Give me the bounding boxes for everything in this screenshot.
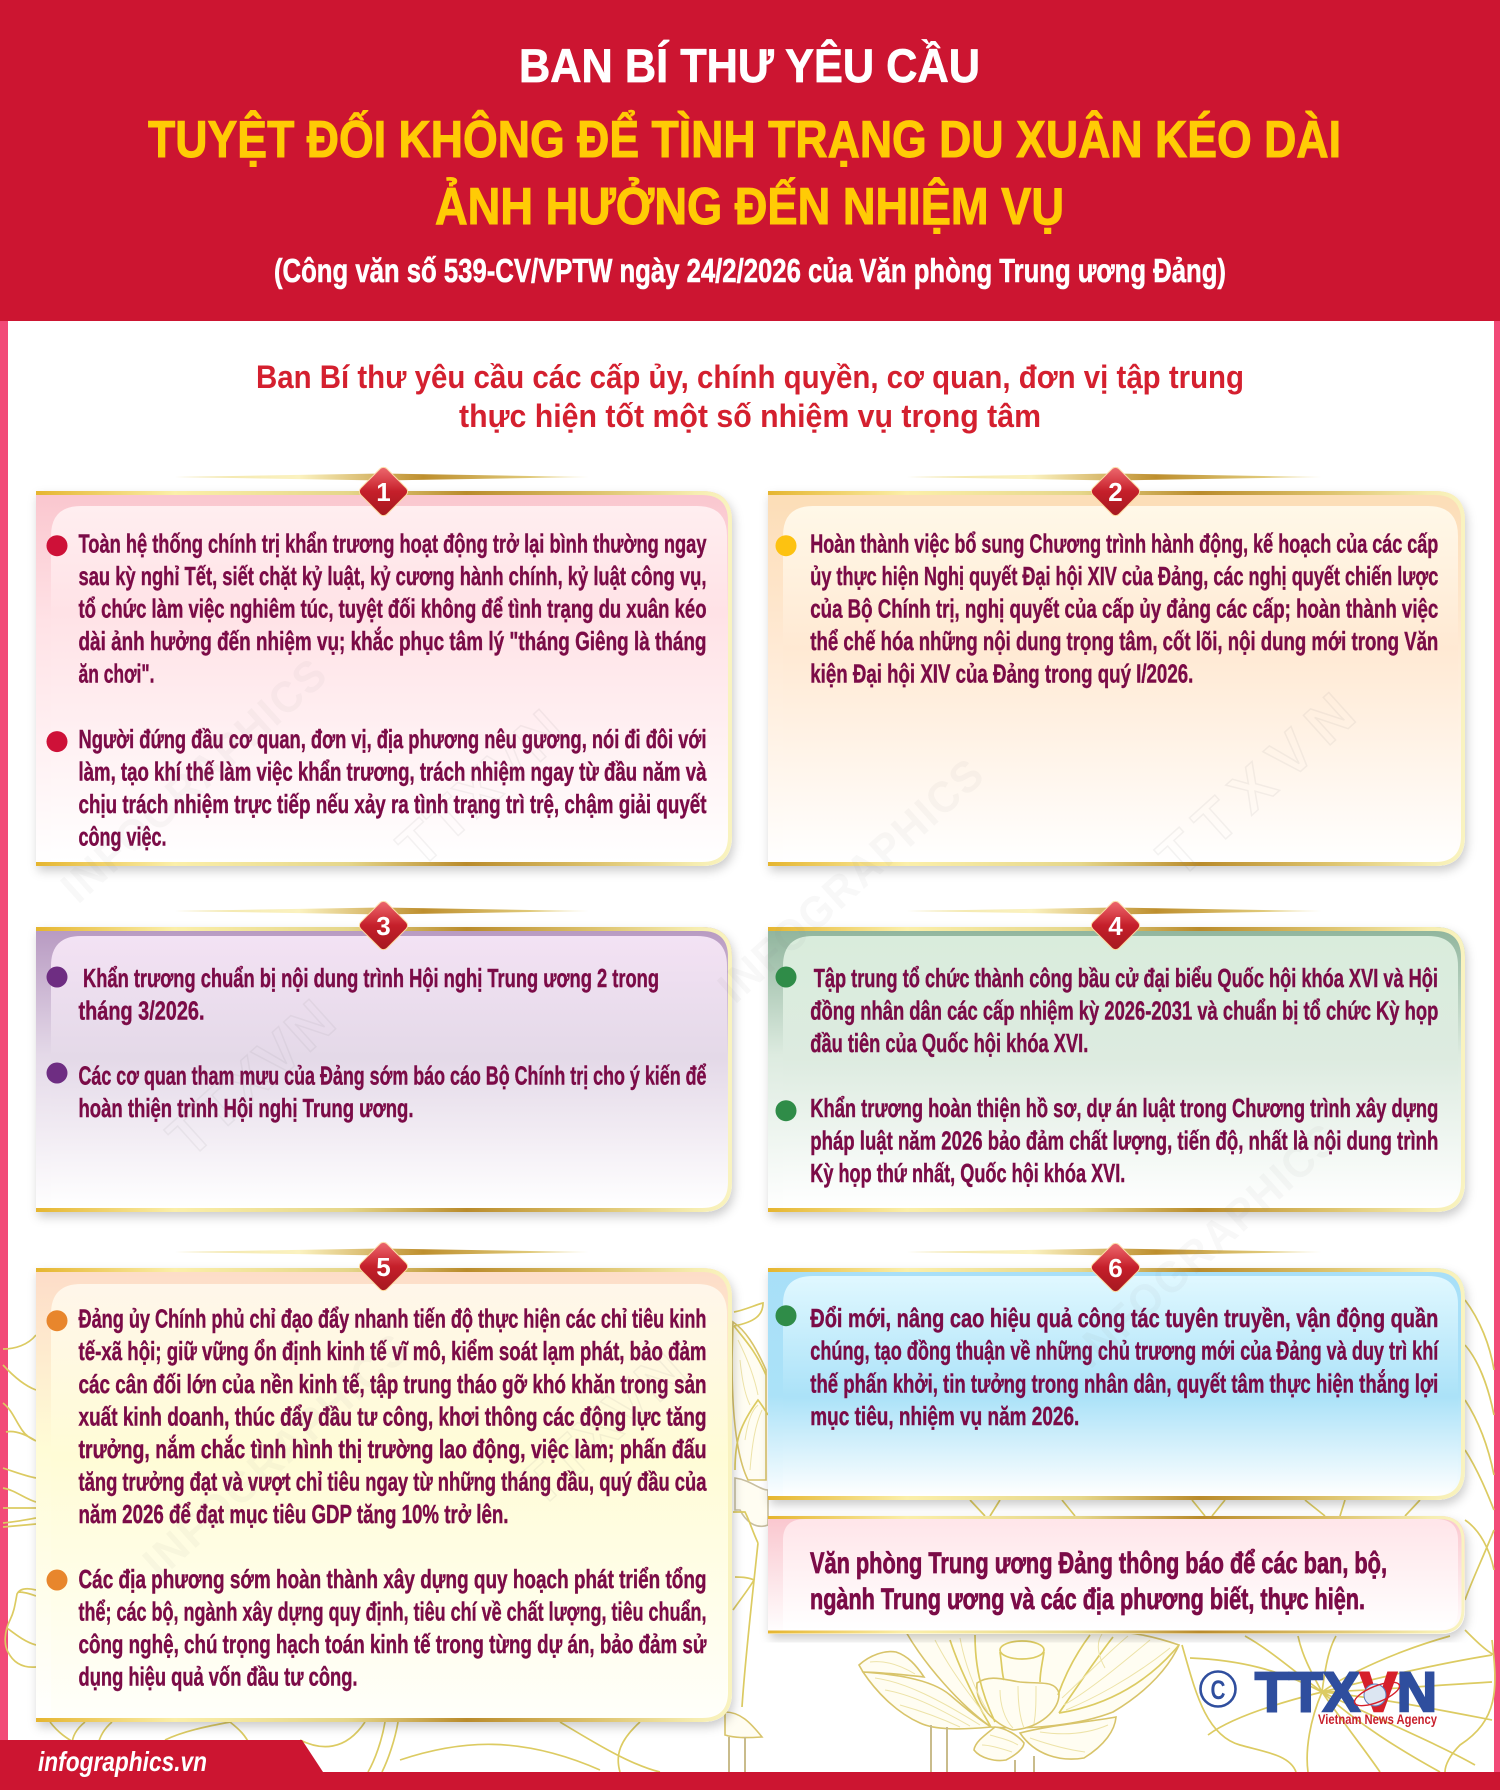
bullet text 5.2: dụng hiệu quả vốn đầu tư công. — [78, 1662, 358, 1692]
badge 3: 3 — [376, 911, 391, 941]
bullet text 5.1: trưởng, nắm chắc tình hình thị trường lao động, việc làm; phấn đấu — [78, 1434, 706, 1464]
document reference: (Công văn số 539-CV/VPTW ngày 24/2/2026 của Văn phòng Trung ương Đảng) — [274, 252, 1226, 289]
subheading: Ban Bí thư yêu cầu các cấp ủy, chính quyền, cơ quan, đơn vị tập trung — [256, 359, 1244, 395]
bullet text 4.2: Kỳ họp thứ nhất, Quốc hội khóa XVI. — [810, 1158, 1125, 1188]
subheading: thực hiện tốt một số nhiệm vụ trọng tâm — [459, 398, 1041, 434]
badge 1 — [357, 465, 410, 518]
bullet text 5.2: thể; các bộ, ngành xây dựng quy định, tiêu chí về chất lượng, tiêu chuẩn, — [78, 1597, 706, 1627]
faint watermarks: INFOGRAPHICS — [52, 649, 337, 912]
badge 6 — [1089, 1241, 1142, 1294]
bullet text 1.1: Toàn hệ thống chính trị khẩn trương hoạt động trở lại bình thường ngay — [78, 528, 707, 558]
bullet text 1.2 — [46, 724, 707, 851]
bullet text 2.1 — [776, 528, 1438, 689]
footnote text — [810, 1547, 1387, 1616]
bullet text 3.2: Các cơ quan tham mưu của Đảng sớm báo cáo Bộ Chính trị cho ý kiến để — [78, 1060, 706, 1090]
big lotus flower bottom centre — [859, 1632, 1179, 1772]
panel 6 — [768, 1241, 1465, 1500]
title line 2: TUYỆT ĐỐI KHÔNG ĐỂ TÌNH TRẠNG DU XUÂN KÉO DÀI — [148, 110, 1341, 169]
bullet text 3.1: Khẩn trương chuẩn bị nội dung trình Hội nghị Trung ương 2 trong — [83, 963, 659, 993]
agency name: Vietnam News Agency — [1318, 1712, 1437, 1727]
title line 1: BAN BÍ THƯ YÊU CẦU — [519, 39, 980, 92]
bullet text 5.2: Các địa phương sớm hoàn thành xây dựng quy hoạch phát triển tổng — [78, 1564, 706, 1594]
badge 5 — [357, 1240, 410, 1293]
lotus leaf bottom right — [1182, 1636, 1495, 1772]
TTXVN wordmark: TTXVN — [1255, 1660, 1437, 1723]
faint watermarks: INFOGRAPHICS — [134, 1324, 419, 1587]
panel 2 — [768, 465, 1465, 866]
bullet text 5.1: các cân đối lớn của nền kinh tế, tập trung tháo gỡ khó khăn trong sản — [78, 1369, 706, 1399]
bullet text 5.1: Đảng ủy Chính phủ chỉ đạo đẩy nhanh tiến độ thực hiện các chỉ tiêu kinh — [78, 1304, 706, 1334]
bullet text 6.1 — [776, 1303, 1439, 1431]
curves below panel 5 — [50, 1722, 660, 1772]
bullet text 3.2 — [46, 1060, 706, 1123]
faint watermarks: TTXVN — [385, 698, 577, 880]
faint watermarks: TTXVN — [1145, 681, 1367, 890]
flower between the columns — [725, 1303, 768, 1772]
bullet text 1.1 — [46, 528, 707, 689]
bullet text 6.1: mục tiêu, nhiệm vụ năm 2026. — [810, 1401, 1079, 1431]
bullet text 4.1 — [776, 963, 1438, 1058]
faint watermarks: TTXVN — [155, 988, 347, 1170]
bullet text 4.2 — [776, 1093, 1438, 1188]
lotus line-art background — [3, 1300, 1495, 1772]
bullet text 5.1: tế-xã hội; giữ vững ổn định kinh tế vĩ mô, kiểm soát lạm phát, bảo đảm — [78, 1336, 706, 1366]
copyright mark: C — [1210, 1675, 1226, 1705]
header band — [0, 0, 1500, 321]
badge 5: 5 — [376, 1252, 391, 1282]
badge 3 — [357, 899, 410, 952]
bullet text 5.1: năm 2026 để đạt mục tiêu GDP tăng 10% trở lên. — [78, 1499, 508, 1529]
bullet text 5.2: công nghệ, chú trọng hạch toán kinh tế trong từng dự án, bảo đảm sử — [78, 1629, 707, 1659]
copyright mark — [1200, 1672, 1236, 1706]
panel 4 — [768, 899, 1465, 1212]
bullet text 1.2: Người đứng đầu cơ quan, đơn vị, địa phương nêu gương, nói đi đôi với — [78, 724, 706, 754]
subheading — [256, 359, 1244, 434]
bullet text 1.2: chịu trách nhiệm trực tiếp nếu xảy ra tình trạng trì trệ, chậm giải quyết — [78, 789, 707, 819]
flower in the left margin — [3, 1335, 36, 1667]
faint watermarks: INFOGRAPHICS — [709, 749, 994, 1012]
bullet text 3.1 — [46, 963, 659, 1026]
panel 1 — [36, 465, 732, 866]
bullet text 5.1: xuất kinh doanh, thúc đẩy đầu tư công, khơi thông các động lực tăng — [78, 1401, 706, 1431]
strokes between panel 6 and the footnote — [970, 1500, 1420, 1516]
footer band — [0, 1740, 1500, 1790]
title line 3: ẢNH HƯỞNG ĐẾN NHIỆM VỤ — [435, 177, 1064, 236]
bullet text 1.2: công việc. — [78, 821, 166, 851]
TTXVN logo — [1200, 1660, 1437, 1727]
bullet text 3.1: tháng 3/2026. — [78, 996, 204, 1026]
faint watermarks: INFOGRAPHICS — [1064, 1114, 1349, 1377]
panel 5 — [36, 1240, 732, 1722]
badge 4 — [1089, 899, 1142, 952]
website name: infographics.vn — [38, 1746, 207, 1777]
footnote panel — [768, 1516, 1465, 1634]
badge 4: 4 — [1108, 911, 1123, 941]
faint watermarks: TTXVN — [505, 1338, 697, 1520]
bullet text 1.1: tổ chức làm việc nghiêm túc, tuyệt đối không để tình trạng du xuân kéo — [78, 594, 706, 624]
bullet text 2.1: kiện Đại hội XIV của Đảng trong quý I/2026. — [810, 659, 1193, 689]
badge 2 — [1089, 465, 1142, 518]
faint watermarks — [52, 649, 1367, 1587]
badge 1: 1 — [376, 477, 391, 507]
badge 6: 6 — [1108, 1253, 1123, 1283]
bullet text 1.1: ăn chơi". — [78, 659, 154, 689]
bullet text 5.1 — [46, 1304, 707, 1529]
bullet text 5.1: tăng trưởng đạt và vượt chỉ tiêu ngay từ những tháng đầu, quý đầu của — [78, 1466, 707, 1496]
globe on logo — [1352, 1678, 1402, 1710]
bullet text 1.2: làm, tạo khí thế làm việc khẩn trương, trách nhiệm ngay từ đầu năm và — [78, 756, 707, 786]
bullet text 1.1: dài ảnh hưởng đến nhiệm vụ; khắc phục tâm lý "tháng Giêng là tháng — [78, 626, 706, 656]
badge 2: 2 — [1108, 477, 1123, 507]
flower in the right margin — [1465, 1300, 1494, 1655]
bullet text 3.2: hoàn thiện trình Hội nghị Trung ương. — [78, 1093, 414, 1123]
bullet text 4.1: đầu tiên của Quốc hội khóa XVI. — [810, 1028, 1088, 1058]
panel 3 — [36, 899, 732, 1212]
bullet text 5.2 — [46, 1564, 707, 1692]
bullet text 1.1: sau kỳ nghỉ Tết, siết chặt kỷ luật, kỷ cương hành chính, kỷ luật công vụ, — [78, 561, 706, 591]
